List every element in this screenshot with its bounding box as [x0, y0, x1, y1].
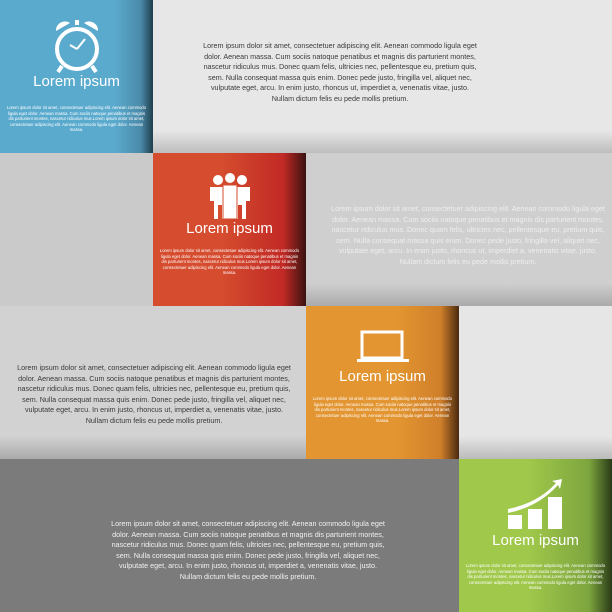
small text: Lorem ipsum dolor sit amet, consectetuer adipiscing elit. Aenean commodo ligula eget dolor. Aenean massa. Cum sociis natoque penatibus et magnis dis parturient montes, nascetur ridiculus mus.Lorem ipsum dolor sit amet, consectetuer adipiscing elit. Aenean commodo ligula eget dolor. Aenean massa.: [160, 248, 299, 275]
card: orange laptop: [306, 306, 459, 459]
text block row3: Lorem ipsum dolor sit amet, consectetuer adipiscing elit. Aenean commodo ligula eget dolor. Aenean massa. Cum sociis natoque penatibus et magnis dis parturient montes, nascetur ridiculus mus. Donec quam felis, ultricies nec, pellentesque eu, pretium quis, sem. Nulla consequat massa quis enim. Donec pede justo, fringilla vel, aliquet nec, vulputate eget, arcu. In enim justo, rhoncus ut, imperdiet a, venenatis vitae, justo. Nullam dictum felis eu pede mollis pretium.: [17, 363, 291, 425]
icon: alarm clock: [55, 20, 99, 74]
panel: row4 text: [0, 459, 459, 612]
panel: row2 left: [0, 153, 153, 306]
heading: Lorem ipsum: [492, 532, 579, 549]
small text: Lorem ipsum dolor sit amet, consectetuer adipiscing elit. Aenean commodo ligula eget dolor. Aenean massa. Cum sociis natoque penatibus et magnis dis parturient montes, nascetur ridiculus mus.Lorem ipsum dolor sit amet, consectetuer adipiscing elit. Aenean commodo ligula eget dolor. Aenean massa.: [313, 396, 452, 423]
panel: row1 text: [150, 0, 612, 153]
text block row4: Lorem ipsum dolor sit amet, consectetuer adipiscing elit. Aenean commodo ligula eget dolor. Aenean massa. Cum sociis natoque penatibus et magnis dis parturient montes, nascetur ridiculus mus. Donec quam felis, ultricies nec, pellentesque eu, pretium quis, sem. Nulla consequat massa quis enim. Donec pede justo, fringilla vel, aliquet nec, vulputate eget, arcu. In enim justo, rhoncus ut, imperdiet a, venenatis vitae, justo. Nullam dictum felis eu pede mollis pretium.: [111, 519, 385, 581]
card: blue clock: [0, 0, 153, 153]
small text: Lorem ipsum dolor sit amet, consectetuer adipiscing elit. Aenean commodo ligula eget dolor. Aenean massa. Cum sociis natoque penatibus et magnis dis parturient montes, nascetur ridiculus mus.Lorem ipsum dolor sit amet, consectetuer adipiscing elit. Aenean commodo ligula eget dolor. Aenean massa.: [7, 105, 146, 132]
icon: growth chart: [508, 479, 562, 529]
panel: row3 text: [0, 306, 306, 459]
icon: people: [210, 173, 250, 219]
card: red team: [153, 153, 306, 306]
panel: row3 right: [459, 306, 612, 459]
text block row2: Lorem ipsum dolor sit amet, consectetuer adipiscing elit. Aenean commodo ligula eget dolor. Aenean massa. Cum sociis natoque penatibus et magnis dis parturient montes, nascetur ridiculus mus. Donec quam felis, ultricies nec, pellentesque eu, pretium quis, sem. Nulla consequat massa quis enim. Donec pede justo, fringilla vel, aliquet nec, vulputate eget, arcu. In enim justo, rhoncus ut, imperdiet a, venenatis vitae, justo. Nullam dictum felis eu pede mollis pretium.: [331, 204, 605, 266]
heading: Lorem ipsum: [186, 220, 273, 237]
text block row1: Lorem ipsum dolor sit amet, consectetuer adipiscing elit. Aenean commodo ligula eget dolor. Aenean massa. Cum sociis natoque penatibus et magnis dis parturient montes, nascetur ridiculus mus. Donec quam felis, ultricies nec, pellentesque eu, pretium quis, sem. Nulla consequat massa quis enim. Donec pede justo, fringilla vel, aliquet nec, vulputate eget, arcu. In enim justo, rhoncus ut, imperdiet a, venenatis vitae, justo. Nullam dictum felis eu pede mollis pretium.: [203, 41, 477, 103]
small text: Lorem ipsum dolor sit amet, consectetuer adipiscing elit. Aenean commodo ligula eget dolor. Aenean massa. Cum sociis natoque penatibus et magnis dis parturient montes, nascetur ridiculus mus.Lorem ipsum dolor sit amet, consectetuer adipiscing elit. Aenean commodo ligula eget dolor. Aenean massa.: [466, 563, 605, 590]
heading: Lorem ipsum: [33, 73, 120, 90]
card: green chart: [459, 459, 612, 612]
icon: laptop: [357, 330, 409, 362]
panel: row2 text: [306, 153, 612, 306]
heading: Lorem ipsum: [339, 368, 426, 385]
